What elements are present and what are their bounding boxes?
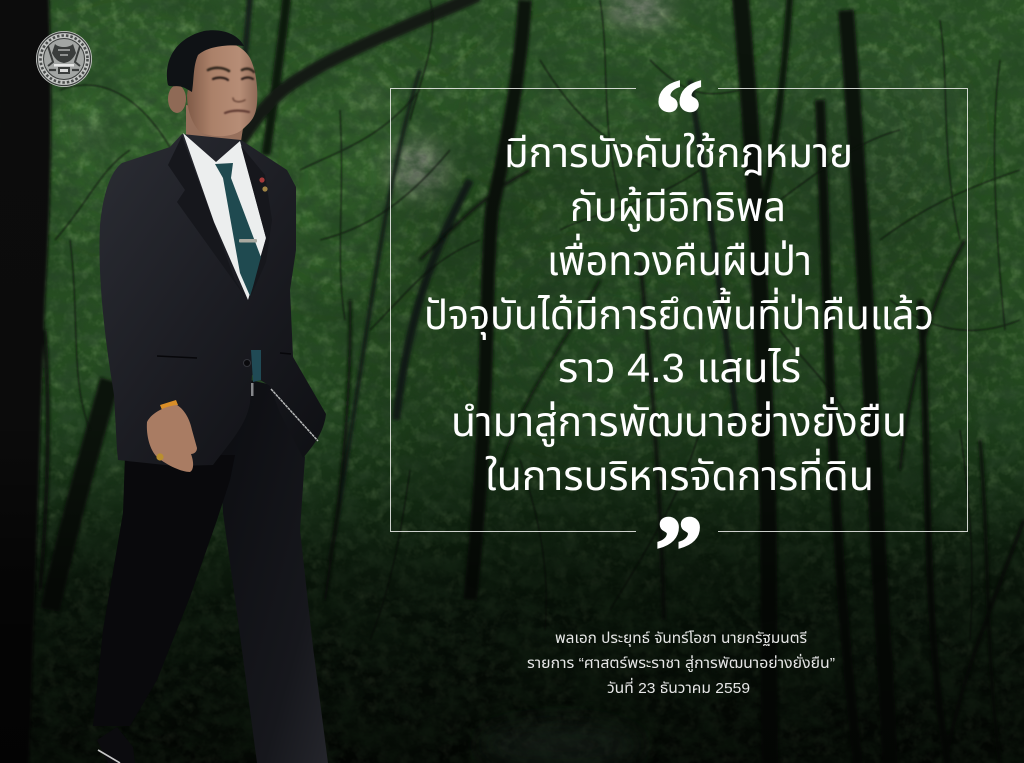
lapel pins [259, 177, 268, 192]
jacket [100, 134, 326, 466]
ring [156, 453, 164, 461]
attribution text: รายการ “ศาสตร์พระราชา สู่การพัฒนาอย่างยั่งยืน” [527, 653, 835, 672]
necktie [215, 163, 262, 296]
quote text: นำมาสู่การพัฒนาอย่างยั่งยืน [451, 396, 907, 447]
government seal logo [36, 31, 92, 87]
hair [167, 30, 244, 92]
lower tie segment [251, 350, 261, 382]
closing quotation mark: ” [655, 496, 703, 603]
head [187, 42, 257, 136]
jacket lining stripe [271, 389, 318, 441]
figure: man in dark suit walking [93, 30, 328, 763]
attribution text: พลเอก ประยุทธ์ จันทร์โอชา นายกรัฐมนตรี [555, 630, 807, 647]
opening quotation mark: “ [655, 60, 703, 167]
fine branches [55, 0, 1020, 640]
jacket button and buckle [244, 360, 254, 396]
attribution text: วันที่ 23 ธันวาคม 2559 [607, 677, 750, 697]
facial features [208, 68, 254, 113]
hand [147, 405, 197, 472]
lapels [168, 136, 272, 298]
attribution text [527, 630, 835, 697]
quote text: ในการบริหารจัดการที่ดิน [485, 448, 874, 499]
quote text [424, 130, 934, 499]
quote text: ปัจจุบันได้มีการยึดพื้นที่ป่าคืนแล้ว [424, 287, 934, 340]
tie bar [239, 239, 257, 242]
orange wristband [160, 400, 178, 410]
quote text: มีการบังคับใช้กฎหมาย [504, 130, 853, 176]
neck [186, 105, 245, 165]
jacket pocket [157, 353, 291, 358]
shirt [183, 133, 266, 300]
ear [168, 85, 186, 113]
shoe [97, 727, 135, 763]
quote frame [390, 88, 968, 532]
quote text: กับผู้มีอิทธิพล [570, 184, 786, 232]
right trouser leg [220, 380, 328, 763]
left trouser leg [93, 455, 235, 726]
quote text: ราว 4.3 แสนไร่ [558, 345, 801, 391]
quote text: เพื่อทวงคืนผืนป่า [547, 233, 812, 284]
